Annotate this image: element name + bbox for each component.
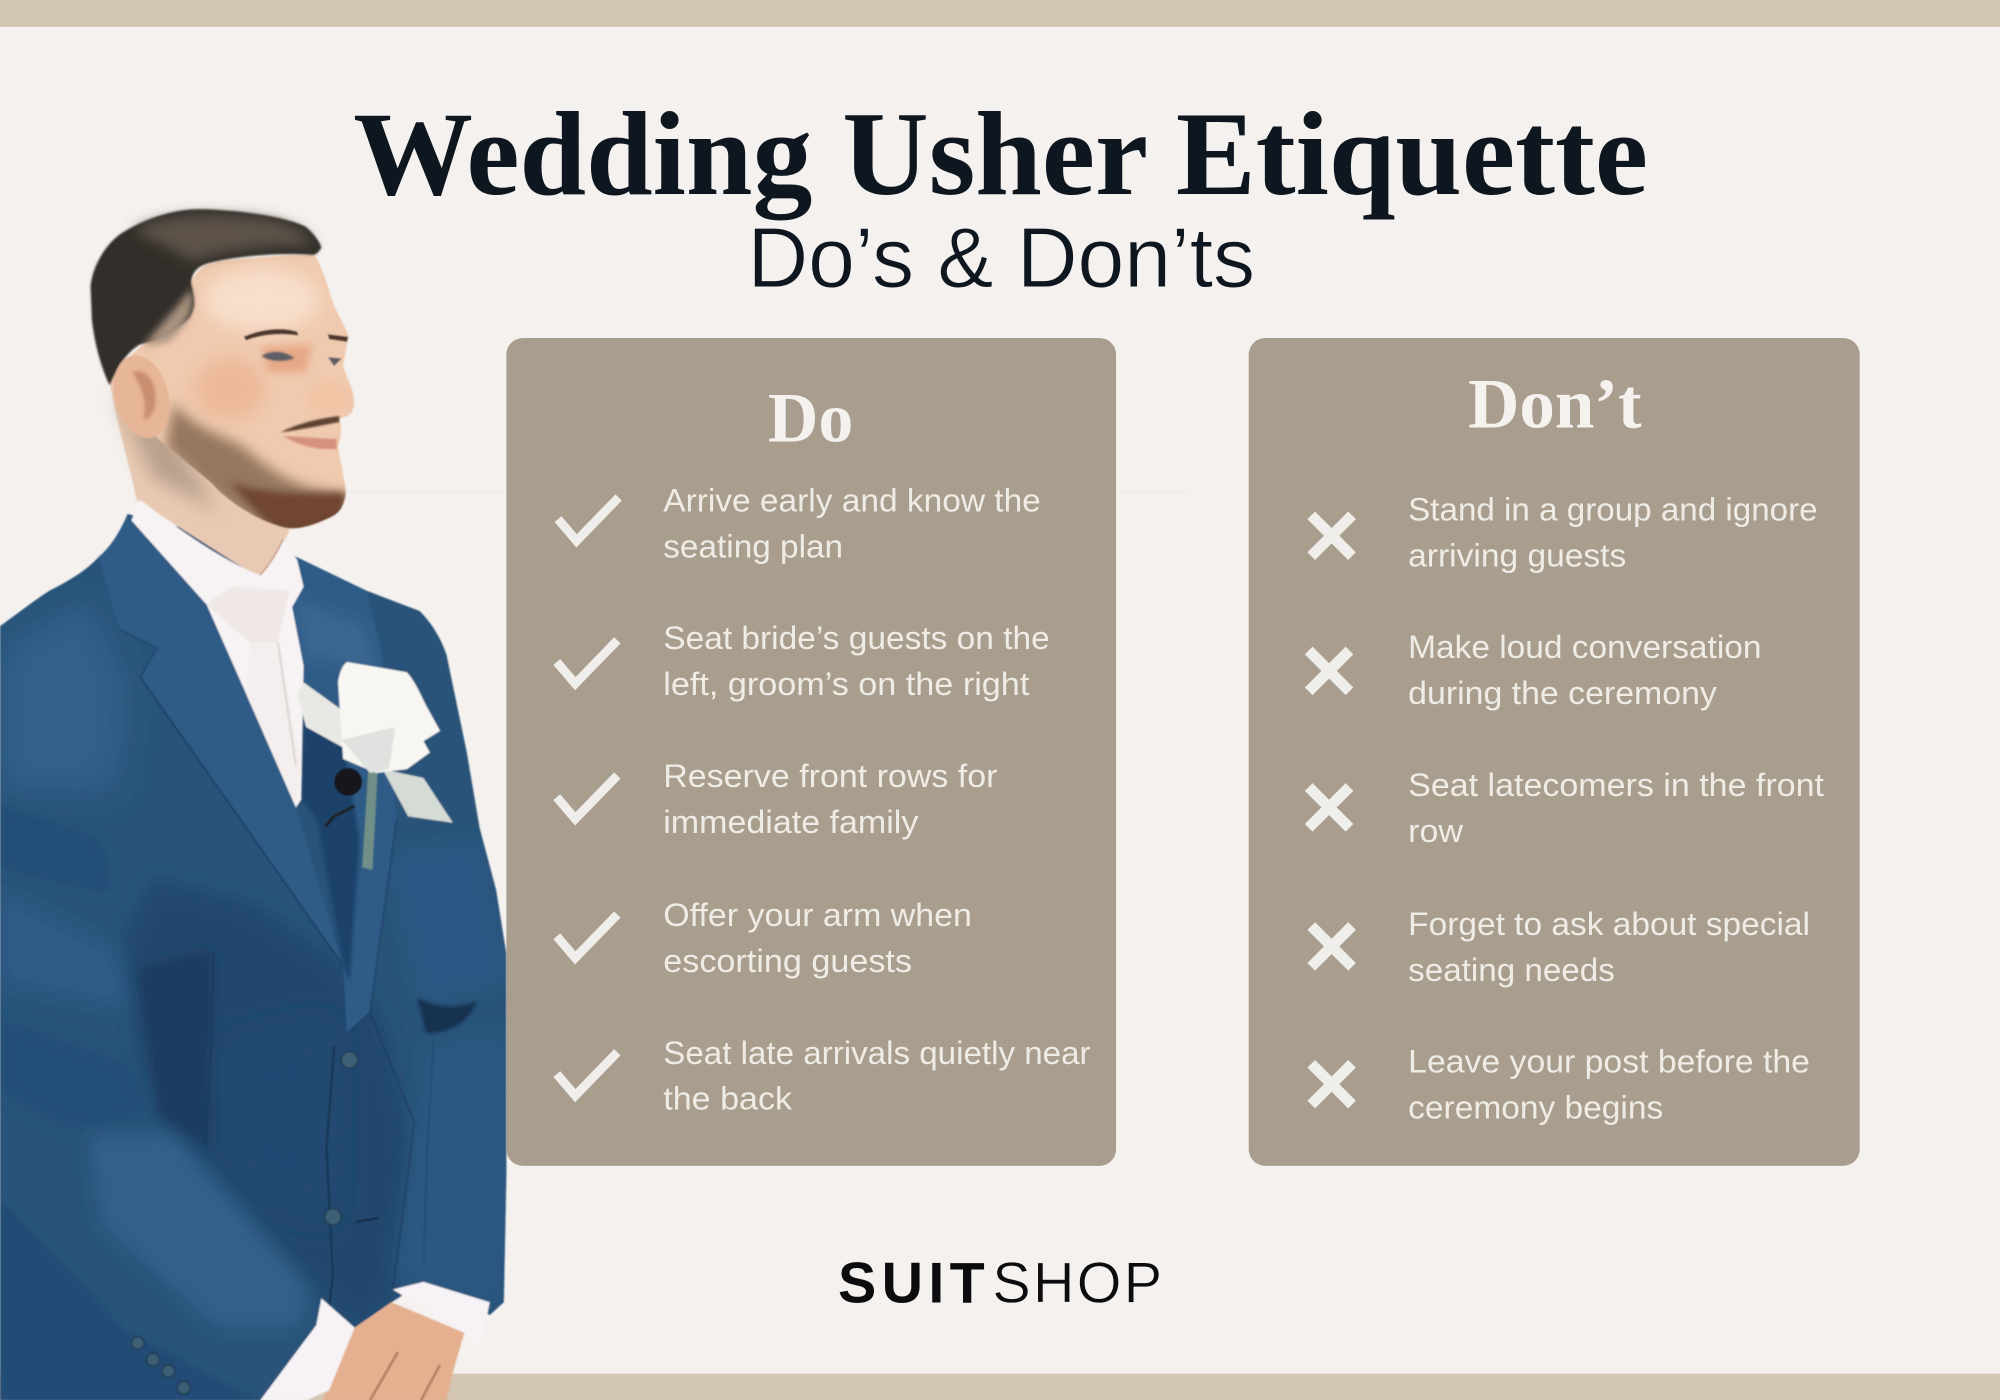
heading: do: Do — [768, 378, 853, 457]
ear — [105, 349, 178, 444]
lips — [283, 436, 337, 449]
illustration: groom in navy suit — [0, 209, 506, 1400]
do item 5: the back — [663, 1081, 793, 1117]
eyes and brows — [244, 329, 298, 341]
do item 1 — [558, 482, 1041, 564]
do item 1: seating plan — [663, 528, 843, 564]
don't item 2: during the ceremony — [1408, 675, 1718, 711]
don't item 5: ceremony begins — [1408, 1090, 1663, 1126]
don't item 5: Leave your post before the — [1408, 1044, 1810, 1080]
logo: suitshop: SHOP — [992, 1251, 1162, 1315]
do item 3 — [557, 758, 998, 840]
do item 3: immediate family — [663, 804, 919, 840]
panel: do — [506, 338, 1116, 1166]
face — [91, 209, 354, 542]
shirt collar and tie — [131, 500, 304, 807]
do item 2 — [557, 620, 1050, 702]
top band — [0, 0, 2000, 27]
don't item 2: Make loud conversation — [1408, 629, 1761, 665]
panel: don't — [1249, 338, 1860, 1166]
don't item 4 — [1311, 906, 1810, 988]
jacket buttons — [131, 1052, 358, 1394]
do item 5 — [557, 1035, 1091, 1117]
don't item 4: Forget to ask about special — [1408, 906, 1810, 942]
boutonniere — [297, 662, 453, 870]
do item 4: Offer your arm when — [663, 897, 972, 933]
don't item 4: seating needs — [1408, 952, 1615, 988]
subtitle: Do’s & Don’ts — [747, 211, 1255, 306]
do item 2: left, groom’s on the right — [663, 666, 1029, 702]
hair — [91, 209, 321, 385]
logo: suitshop: SUIT — [838, 1251, 985, 1315]
don't item 5 — [1311, 1044, 1810, 1126]
title: Wedding Usher Etiquette — [353, 87, 1648, 221]
hands and shirt cuffs — [260, 1282, 490, 1400]
suit jacket — [0, 514, 506, 1400]
logo: suitshop — [838, 1251, 1162, 1315]
don't item 3: Seat latecomers in the front — [1408, 767, 1824, 803]
beard — [166, 402, 351, 542]
don't item 2 — [1309, 629, 1761, 711]
mustache — [281, 416, 339, 432]
heading: don't: Don’t — [1468, 364, 1642, 443]
do item 4: escorting guests — [663, 943, 912, 979]
don't item 1 — [1311, 491, 1818, 573]
bottom band — [0, 1374, 2000, 1400]
don't item 1: arriving guests — [1408, 537, 1626, 573]
do item 1: Arrive early and know the — [663, 482, 1041, 518]
don't item 1: Stand in a group and ignore — [1408, 491, 1818, 527]
don't item 3 — [1309, 767, 1824, 849]
do item 5: Seat late arrivals quietly near — [663, 1035, 1091, 1071]
do item 4 — [557, 897, 972, 979]
do item 2: Seat bride’s guests on the — [663, 620, 1050, 656]
don't item 3: row — [1408, 813, 1464, 849]
neck — [110, 383, 306, 580]
do item 3: Reserve front rows for — [663, 758, 998, 794]
